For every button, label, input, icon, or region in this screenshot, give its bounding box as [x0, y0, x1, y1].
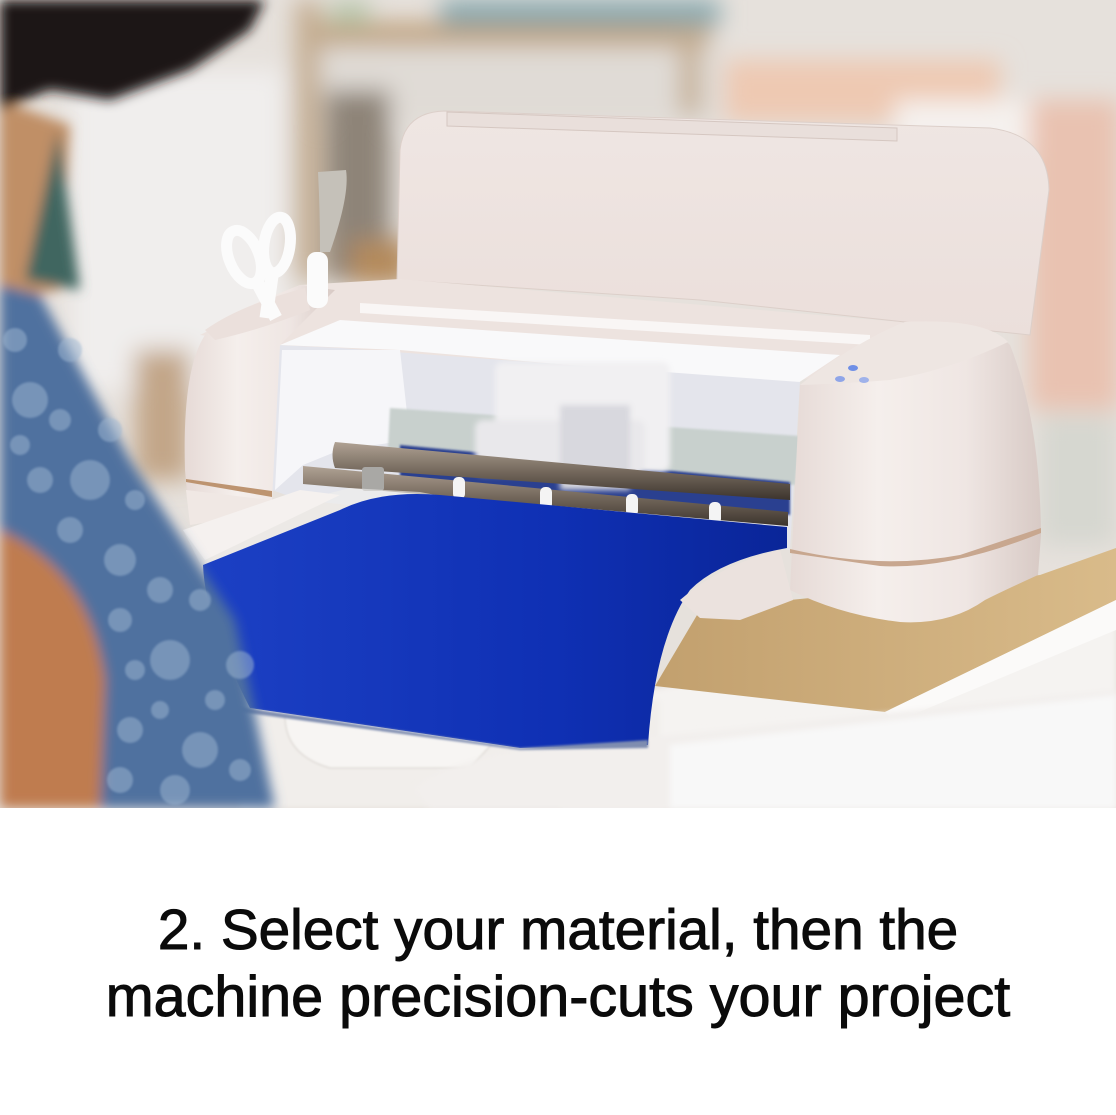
background: blurred room: [0, 0, 1116, 808]
icon: spatula in cup: [307, 170, 347, 308]
machine: front tray: [183, 490, 793, 620]
machine: interior: [272, 345, 800, 550]
machine: open lid: [397, 111, 1049, 335]
machine: moving carriage (motion blur): [475, 362, 670, 490]
machine: left tool cup: [185, 285, 335, 525]
machine: rollers: [303, 442, 790, 526]
caption: step description: [106, 899, 1010, 1029]
icon: scissors in cup: [220, 215, 294, 318]
person: hair, arm, and patterned shirt: [0, 0, 275, 808]
caption: step description: 2. Select your material, then the: [158, 899, 958, 962]
photo: cutting machine on desk: [0, 0, 1116, 808]
machine: right housing: [790, 321, 1041, 622]
material: blue vinyl sheet: [183, 488, 787, 750]
caption: step description: machine precision-cuts your project: [106, 965, 1010, 1029]
desk: wood board and white table: [240, 548, 1116, 808]
machine: body deck: [200, 279, 1005, 385]
